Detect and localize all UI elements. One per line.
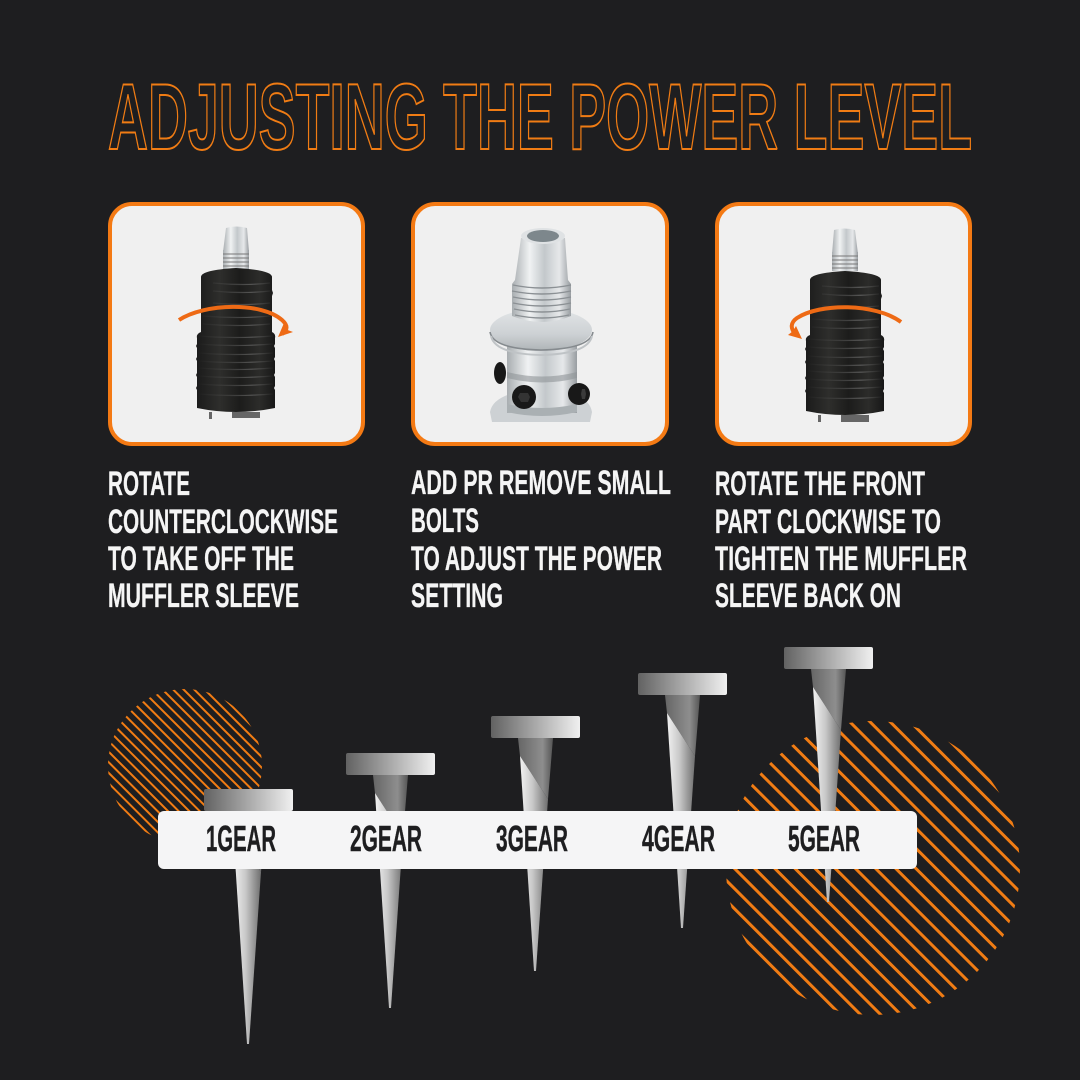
gear labels: 5GEAR: [788, 818, 860, 859]
text block: step 2: [411, 464, 671, 615]
gear labels: [206, 818, 860, 859]
text block: step 3: [715, 465, 967, 615]
gear labels: 2GEAR: [350, 818, 422, 859]
panel: rotate counterclockwise: [110, 204, 363, 444]
decorative hatched circle: large: [726, 721, 1020, 1015]
icon: black muffler sleeve: [196, 268, 275, 419]
text block: step 2: ADD PR REMOVE SMALL: [411, 464, 671, 502]
text block: step 3: SLEEVE BACK ON: [715, 577, 901, 615]
text block: step 2: BOLTS: [411, 502, 479, 540]
icon: bolts: [494, 362, 590, 409]
decorative hatched circle: small: [108, 689, 262, 836]
nail: 4 gear: [638, 673, 727, 928]
nail: 1 gear: [204, 789, 293, 1044]
text block: step 2: SETTING: [411, 577, 503, 615]
nail: 2 gear: [346, 753, 435, 1008]
text block: step 1: MUFFLER SLEEVE: [108, 577, 299, 615]
panel: bolts: [413, 204, 667, 444]
icon: threaded stem: [832, 228, 858, 271]
gear label bar: [158, 811, 917, 869]
text block: step 1: [108, 465, 338, 615]
icon: black muffler sleeve: [805, 271, 884, 422]
nail: 5 gear: [784, 647, 873, 902]
arrow: counterclockwise rotation: [179, 307, 293, 337]
icon: metal collar with bolts: [490, 228, 593, 422]
arrow: clockwise rotation: [788, 307, 901, 339]
gear labels: 4GEAR: [642, 818, 715, 859]
text block: step 1: COUNTERCLOCKWISE: [108, 503, 338, 541]
text block: step 1: TO TAKE OFF THE: [108, 540, 294, 578]
gear labels: 1GEAR: [206, 818, 276, 859]
icon: threaded stem: [223, 226, 249, 269]
text block: step 3: ROTATE THE FRONT: [715, 465, 925, 503]
text block: step 1: ROTATE: [108, 465, 190, 503]
nail: 3 gear: [491, 716, 580, 971]
text block: step 3: PART CLOCKWISE TO: [715, 503, 941, 541]
text block: step 2: TO ADJUST THE POWER: [411, 540, 662, 578]
gear labels: 3GEAR: [496, 818, 568, 859]
panel: rotate clockwise: [717, 204, 970, 444]
